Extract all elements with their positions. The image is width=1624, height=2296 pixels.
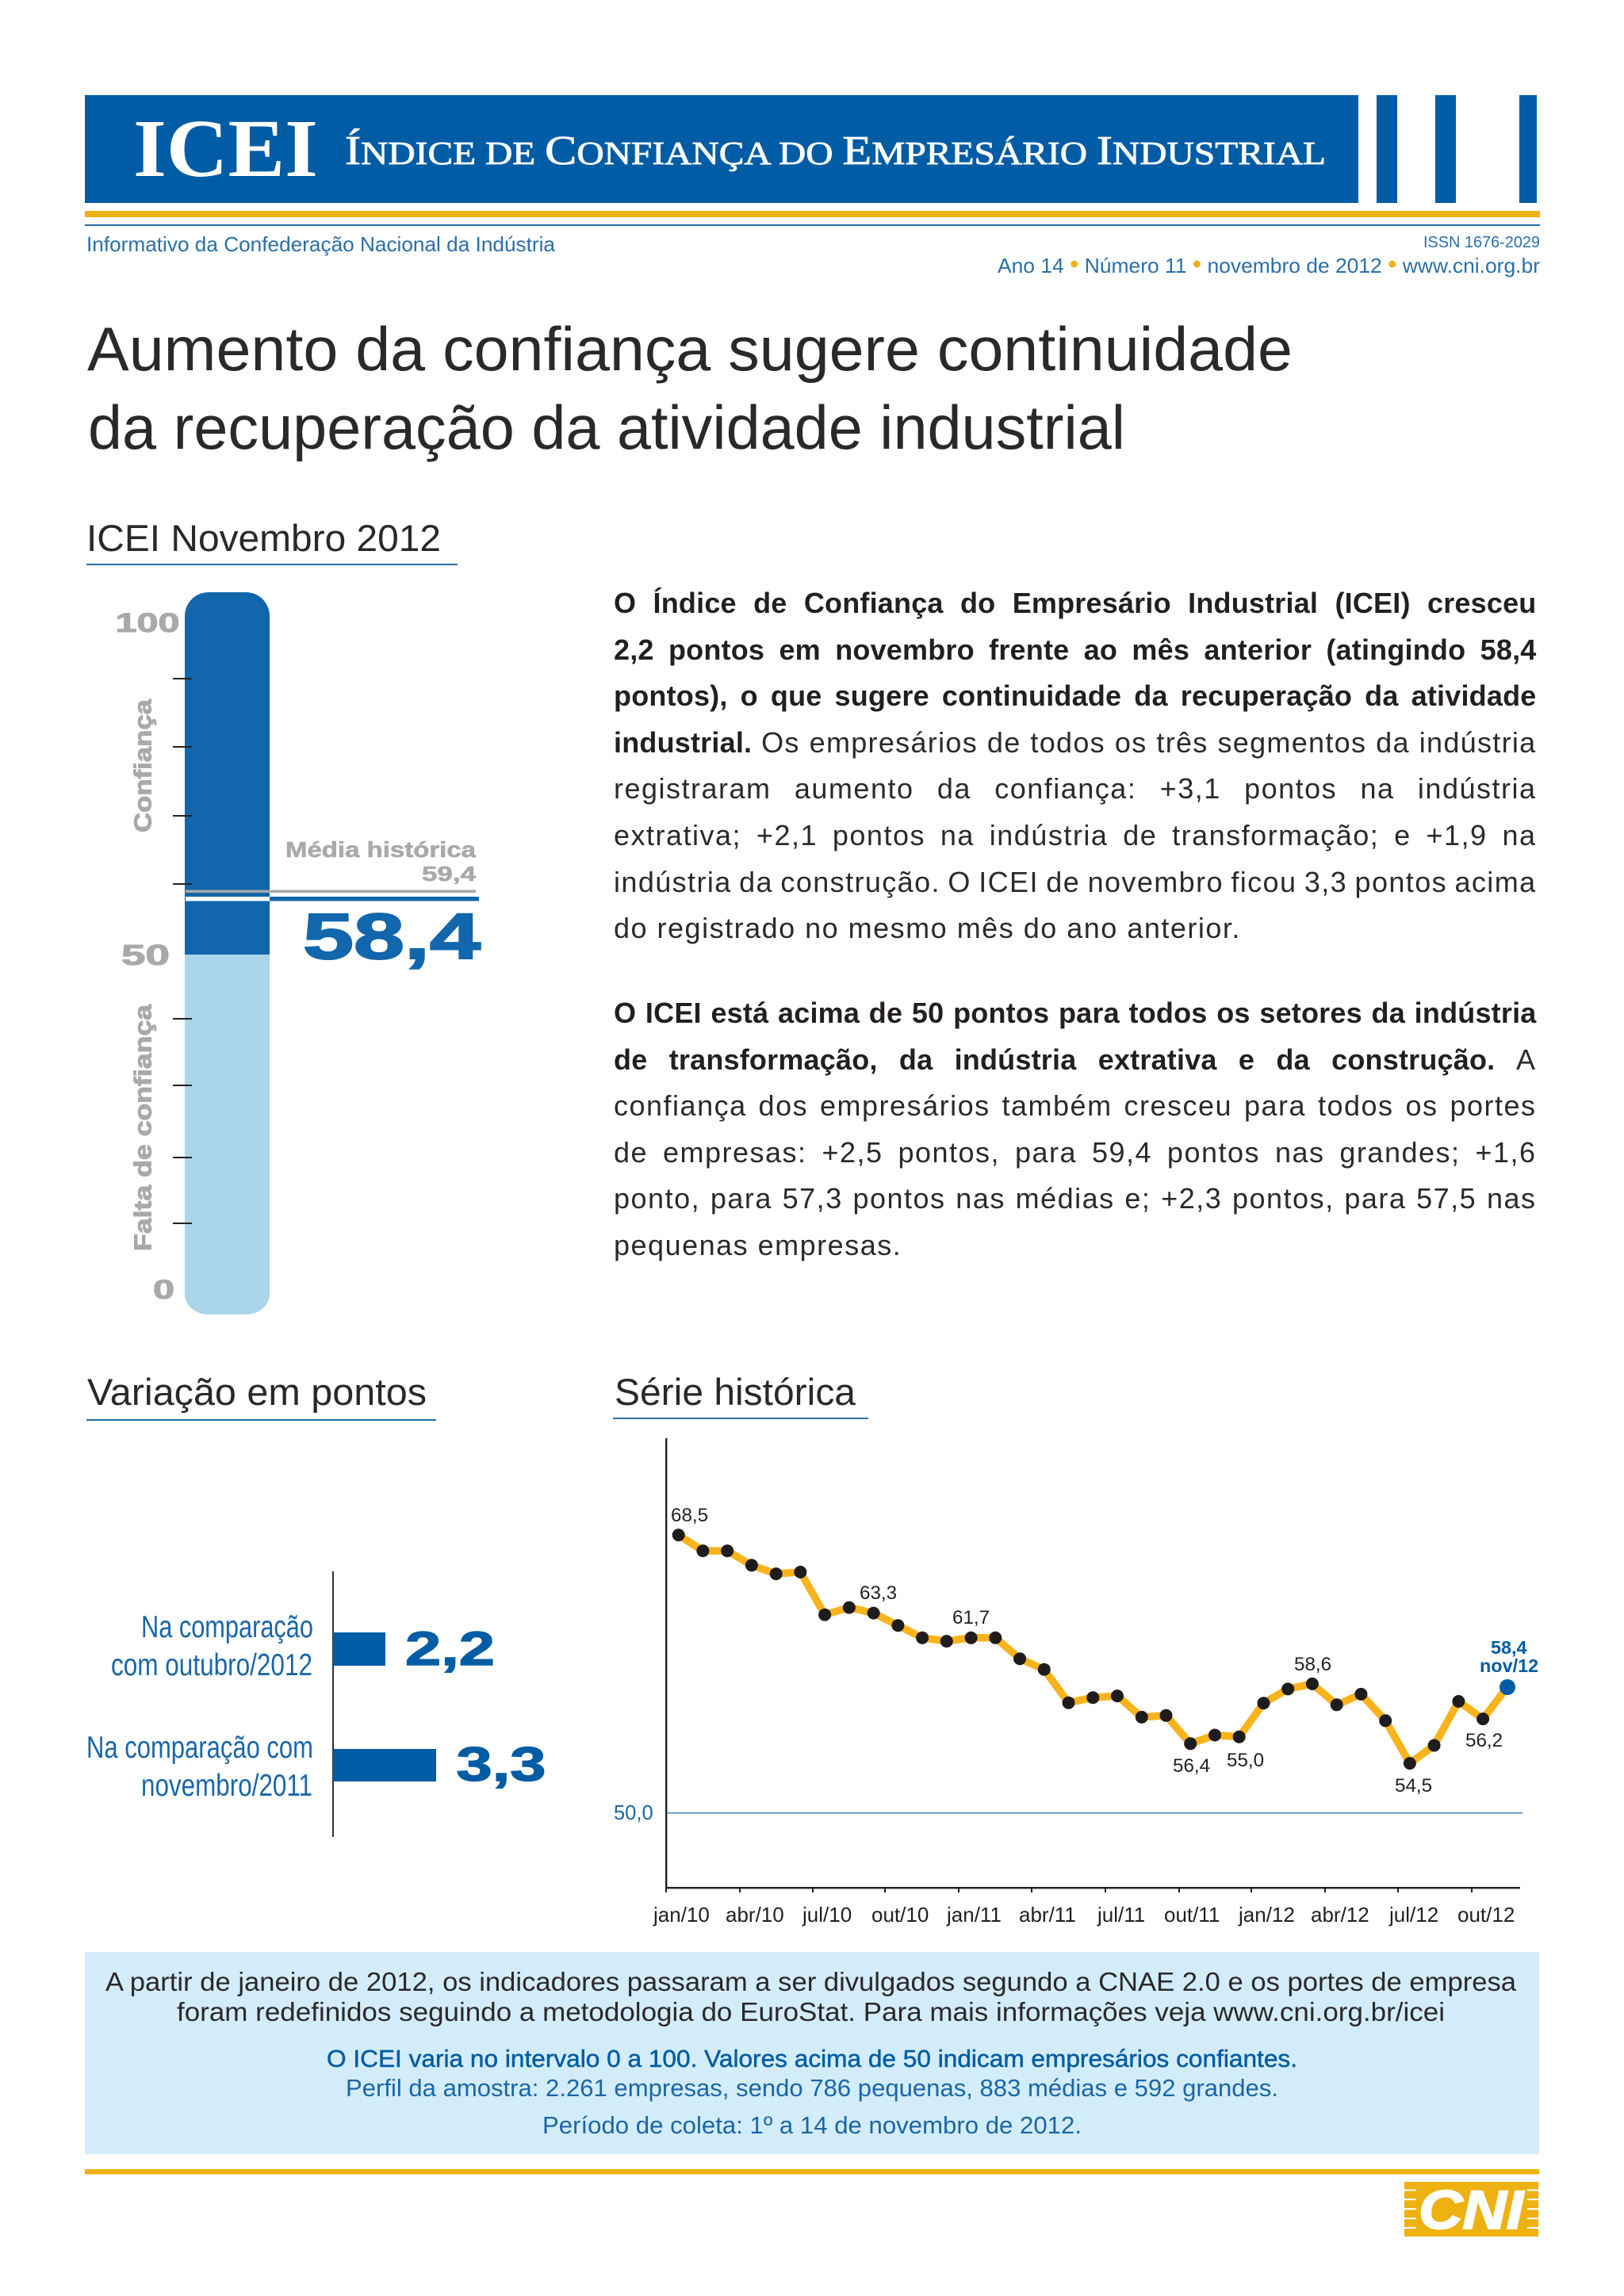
x axis labels: jan/12 bbox=[1238, 1903, 1295, 1927]
axes bbox=[665, 1438, 1520, 1892]
text block: first paragraph: O Índice de Confiança do Empresário Industrial (ICEI) cresceu bbox=[614, 587, 1537, 619]
reference line at 50: 50,0 bbox=[614, 1802, 653, 1824]
data labels bbox=[671, 1505, 1503, 1797]
text block: first paragraph: indústria da construção. O ICEI de novembro ficou 3,3 pontos acima bbox=[614, 866, 1537, 898]
bar chart: variation bbox=[86, 1571, 546, 1837]
x axis labels: abr/11 bbox=[1019, 1903, 1076, 1927]
x axis labels: jul/10 bbox=[802, 1903, 852, 1927]
ISSN: ISSN 1676-2029 bbox=[1423, 234, 1540, 251]
text block: second paragraph: confiança dos empresários também cresceu para todos os portes bbox=[614, 1089, 1537, 1122]
header banner: ICEI bbox=[133, 103, 318, 194]
historical average marker: 59,4 bbox=[422, 862, 477, 886]
data labels: 68,5 bbox=[671, 1505, 708, 1526]
bar: November 2011: novembro/2011 bbox=[141, 1769, 312, 1803]
gauge bar: lack of confidence zone bbox=[185, 955, 270, 1314]
x axis labels: abr/10 bbox=[726, 1903, 784, 1927]
data labels: 56,2 bbox=[1465, 1730, 1503, 1751]
text block: second paragraph: de empresas: +2,5 pontos, para 59,4 pontos nas grandes; +1,6 bbox=[614, 1136, 1537, 1169]
text block: first paragraph: do registrado no mesmo mês do ano anterior. bbox=[614, 912, 1241, 944]
text block: second paragraph: ponto, para 57,3 pontos nas médias e; +2,3 pontos, para 57,5 nas bbox=[614, 1182, 1537, 1215]
data labels: 58,6 bbox=[1294, 1654, 1331, 1675]
x axis labels bbox=[653, 1903, 1515, 1927]
current data point bbox=[1500, 1679, 1515, 1695]
footer information box: Perfil da amostra: 2.261 empresas, sendo 786 pequenas, 883 médias e 592 grandes. bbox=[346, 2074, 1278, 2102]
line chart: historical series bbox=[614, 1438, 1538, 1927]
text block: first paragraph: extrativa; +2,1 pontos na indústria de transformação; e +1,9 na bbox=[614, 819, 1537, 851]
text block: first paragraph: registraram aumento da confiança: +3,1 pontos na indústria bbox=[614, 772, 1537, 805]
current value label: 58,4 bbox=[1491, 1637, 1527, 1658]
scale labels: Falta de confiança bbox=[128, 1004, 157, 1251]
historical average marker: Média histórica bbox=[285, 837, 476, 862]
x axis labels: jul/11 bbox=[1097, 1903, 1145, 1927]
CNI logo: CNI bbox=[1419, 2179, 1525, 2241]
thermometer gauge bbox=[116, 592, 481, 1314]
main title: da recuperação da atividade industrial bbox=[88, 392, 1125, 462]
bar: October 2012 bbox=[111, 1610, 495, 1682]
text block: first paragraph: 2,2 pontos em novembro frente ao mês anterior (atingindo 58,4 bbox=[614, 633, 1537, 666]
data points bbox=[672, 1529, 1489, 1770]
bar: October 2012: com outubro/2012 bbox=[111, 1648, 312, 1682]
data labels: 54,5 bbox=[1395, 1775, 1432, 1797]
text block: first paragraph: industrial. Os empresários de todos os três segmentos da indústria bbox=[614, 726, 1537, 759]
scale labels: 50 bbox=[121, 939, 170, 971]
footer information box: foram redefinidos seguindo a metodologia do EuroStat. Para mais informações veja www.cni.org.br/icei bbox=[177, 1997, 1445, 2026]
scale labels: 0 bbox=[153, 1275, 174, 1305]
footer information box: A partir de janeiro de 2012, os indicadores passaram a ser divulgados segundo a CNAE 2.0 e os portes de empresa bbox=[105, 1967, 1517, 1996]
header banner: ÍNDICE DE CONFIANÇA DO EMPRESÁRIO INDUSTRIAL bbox=[345, 128, 1326, 174]
bar: November 2011: Na comparação com bbox=[86, 1731, 313, 1765]
main title bbox=[87, 314, 1293, 462]
footer information box: Período de coleta: 1º a 14 de novembro de 2012. bbox=[542, 2111, 1082, 2139]
text block: second paragraph bbox=[614, 997, 1537, 1261]
x axis labels: jan/10 bbox=[653, 1903, 710, 1927]
data labels: 55,0 bbox=[1227, 1750, 1264, 1771]
text block: first paragraph bbox=[614, 587, 1537, 944]
text block: second paragraph: O ICEI está acima de 50 pontos para todos os setores da indústria bbox=[614, 997, 1537, 1029]
footer information box bbox=[85, 1952, 1539, 2154]
x axis labels: out/10 bbox=[871, 1903, 929, 1927]
text block: second paragraph: de transformação, da indústria extrativa e da construção. A bbox=[614, 1043, 1537, 1076]
heading: Série histórica: Série histórica bbox=[615, 1371, 856, 1413]
historical average marker bbox=[186, 837, 477, 893]
heading: ICEI Novembro 2012: ICEI Novembro 2012 bbox=[86, 517, 441, 559]
bar: November 2011 bbox=[86, 1731, 546, 1803]
scale labels: 100 bbox=[116, 608, 179, 638]
data labels: 61,7 bbox=[952, 1607, 990, 1628]
heading: Variação em pontos: Variação em pontos bbox=[87, 1371, 427, 1413]
gauge bar: confidence zone bbox=[185, 592, 270, 955]
current value label: nov/12 bbox=[1480, 1655, 1538, 1676]
main title: Aumento da confiança sugere continuidade bbox=[87, 314, 1293, 384]
issue line: Ano 14 • Número 11 • novembro de 2012 • www.cni.org.br bbox=[998, 250, 1540, 278]
data labels: 56,4 bbox=[1173, 1755, 1210, 1777]
bar: October 2012: Na comparação bbox=[141, 1610, 313, 1644]
x axis labels: out/12 bbox=[1457, 1903, 1515, 1927]
scale labels: Confiança bbox=[128, 698, 157, 832]
text block: first paragraph: pontos), o que sugere continuidade da recuperação da atividade bbox=[614, 679, 1537, 712]
publisher line: Informativo da Confederação Nacional da Indústria bbox=[86, 232, 556, 256]
current value label bbox=[1480, 1637, 1538, 1676]
text block: second paragraph: pequenas empresas. bbox=[614, 1229, 902, 1261]
current value marker: 58,4 bbox=[303, 901, 481, 973]
bar: October 2012: 2,2 bbox=[405, 1622, 495, 1675]
x axis labels: abr/12 bbox=[1311, 1903, 1369, 1927]
current value marker bbox=[186, 897, 481, 973]
x axis labels: jan/11 bbox=[946, 1903, 1002, 1927]
header banner bbox=[85, 95, 1537, 203]
x axis labels: out/11 bbox=[1164, 1903, 1220, 1927]
bar: November 2011: 3,3 bbox=[457, 1738, 546, 1791]
series line bbox=[679, 1535, 1507, 1763]
data labels: 63,3 bbox=[860, 1582, 897, 1604]
footer information box: O ICEI varia no intervalo 0 a 100. Valores acima de 50 indicam empresários confiantes. bbox=[327, 2045, 1297, 2072]
x axis labels: jul/12 bbox=[1388, 1903, 1438, 1927]
scale labels bbox=[116, 608, 179, 1305]
